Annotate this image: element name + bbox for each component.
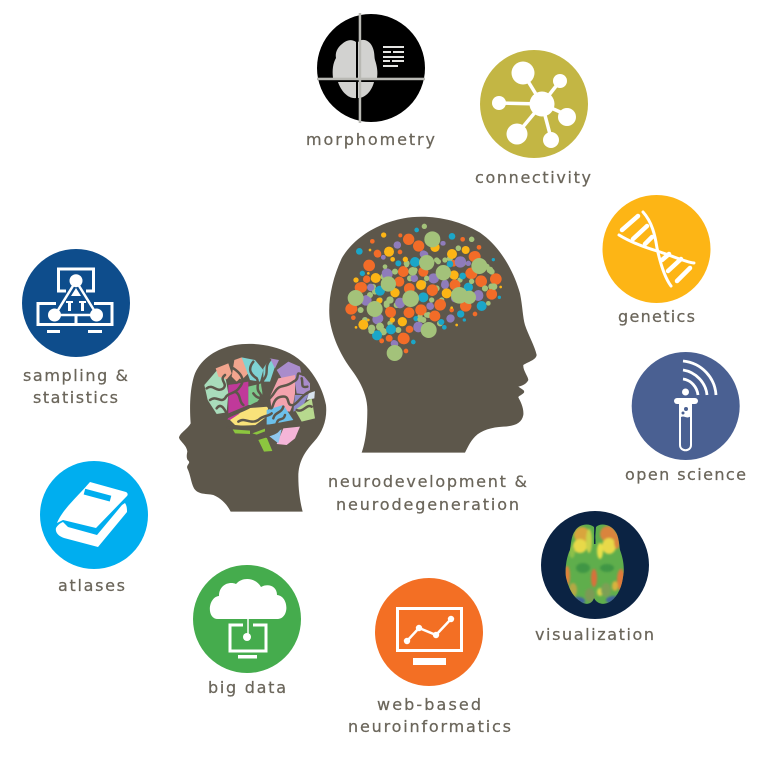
topic: genetics (602, 195, 710, 326)
icon: brain scan (317, 13, 425, 123)
label: sampling & statistics (23, 366, 128, 407)
topic: web-based neuroinformatics (348, 578, 511, 736)
label: visualization: visualization (535, 625, 654, 644)
label: genetics: genetics (618, 307, 695, 326)
child brain patches (204, 357, 315, 452)
adult head silhouette (329, 217, 537, 453)
icon: monitor with line chart (375, 578, 483, 686)
topic: open science (625, 352, 746, 484)
label: atlases: atlases (58, 576, 125, 595)
topic: sampling and statistics (22, 249, 130, 407)
child head silhouette (179, 344, 326, 512)
adult brain dots (345, 224, 502, 361)
label: open science: open science (625, 465, 746, 484)
label: connectivity: connectivity (475, 168, 591, 187)
icon: brain heat map (541, 511, 649, 619)
label: web-based neuroinformatics (348, 695, 511, 736)
label: morphometry: morphometry (306, 130, 435, 149)
label: web-based neuroinformatics: neuroinformatics (348, 717, 511, 736)
icon: cloud and monitor (193, 565, 301, 673)
topic: visualization (535, 511, 654, 644)
child head with parcellated brain (179, 344, 326, 512)
icon: three monitors linked as a triangle (22, 249, 130, 357)
topic: big data (193, 565, 301, 697)
icon: test tube with signal (632, 352, 740, 460)
label: neurodevelopment & neurodegeneration: neurodevelopment & (328, 472, 527, 491)
icon: DNA helix (602, 195, 710, 303)
label: sampling & statistics: statistics (33, 388, 118, 407)
label: sampling & statistics: sampling & (23, 366, 128, 385)
icon: network nodes (480, 50, 588, 158)
label: neurodevelopment & neurodegeneration: neurodegeneration (336, 495, 519, 514)
child brain sulci (207, 360, 314, 437)
adult head with dotted brain (329, 217, 537, 453)
topic: atlases (40, 461, 148, 595)
label: neurodevelopment & neurodegeneration (328, 472, 527, 514)
icon: book (40, 461, 148, 569)
topic: connectivity (475, 50, 591, 187)
label: big data: big data (208, 678, 286, 697)
label: web-based neuroinformatics: web-based (377, 695, 481, 714)
topic: morphometry (306, 13, 435, 149)
